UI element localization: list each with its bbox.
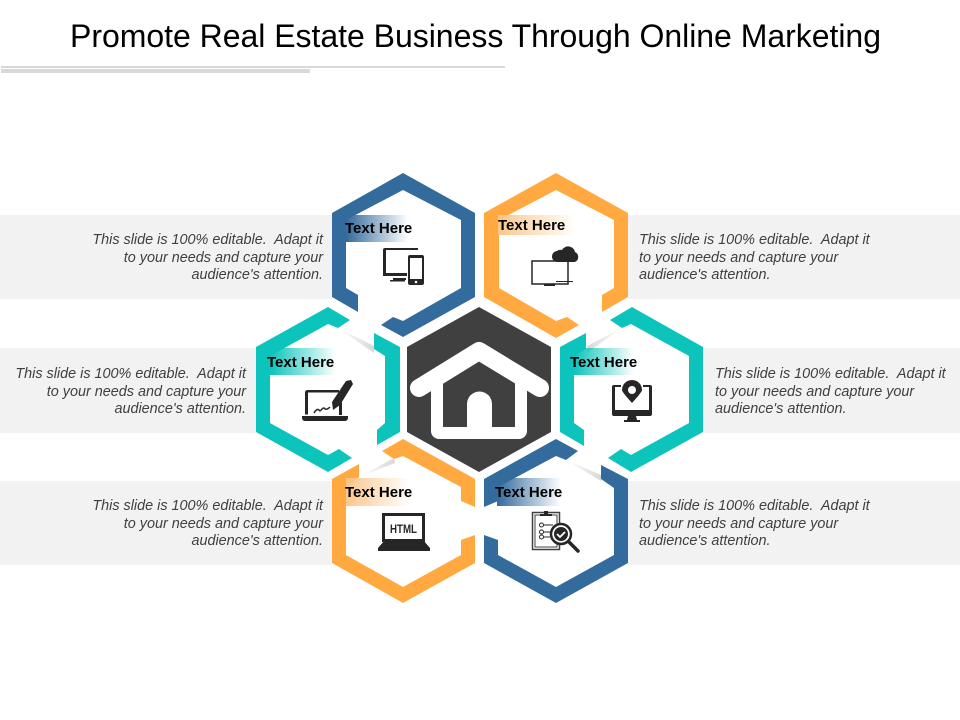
text block: bottom left: to your needs and capture your bbox=[124, 516, 324, 532]
icon: laptop with HTML screen bbox=[378, 513, 430, 551]
label: Text Here bbox=[498, 217, 565, 234]
text block: bottom left: This slide is 100% editable. Adapt it bbox=[92, 498, 324, 514]
text block: middle right: This slide is 100% editable. Adapt it bbox=[715, 366, 947, 382]
label: Text Here bbox=[495, 484, 562, 501]
text block: middle left: to your needs and capture your bbox=[47, 384, 247, 400]
panel: top right orange hexagon bbox=[484, 173, 628, 338]
text block: top left: audience's attention. bbox=[191, 267, 323, 283]
icon: monitor and phone bbox=[383, 248, 424, 285]
text block: top right: This slide is 100% editable. Adapt it bbox=[639, 232, 871, 248]
text block: top right: audience's attention. bbox=[639, 267, 771, 283]
center hexagon with house bbox=[407, 307, 551, 472]
text block: middle right: to your needs and capture your bbox=[715, 384, 915, 400]
text block: middle left: audience's attention. bbox=[114, 401, 246, 417]
label: Text Here bbox=[345, 484, 412, 501]
text block: bottom right: This slide is 100% editable. Adapt it bbox=[639, 498, 871, 514]
text block: middle right bbox=[715, 366, 947, 417]
text block: top left bbox=[92, 232, 324, 283]
background bands bbox=[0, 215, 960, 565]
text block: middle left bbox=[15, 366, 247, 417]
gap shadow bbox=[338, 328, 374, 353]
text block: bottom left: audience's attention. bbox=[191, 533, 323, 549]
icon: clipboard with magnifier bbox=[532, 511, 578, 551]
text block: top right bbox=[639, 232, 871, 283]
title underline bbox=[1, 66, 505, 73]
text block: middle left: This slide is 100% editable. Adapt it bbox=[15, 366, 247, 382]
gap shadow bbox=[566, 460, 601, 481]
panel: middle left teal hexagon bbox=[256, 307, 400, 472]
label: Text Here bbox=[267, 354, 334, 371]
panel: top left blue hexagon bbox=[332, 173, 475, 337]
panel: bottom left orange hexagon bbox=[332, 439, 475, 603]
text block: bottom right: audience's attention. bbox=[639, 533, 771, 549]
panel: bottom right blue hexagon bbox=[484, 439, 628, 603]
gap shadow bbox=[587, 328, 622, 353]
text block: bottom right bbox=[639, 498, 871, 549]
text block: middle right: audience's attention. bbox=[715, 401, 847, 417]
panel: middle right teal hexagon bbox=[560, 307, 703, 472]
title: Promote Real Estate Business Through Online Marketing bbox=[70, 18, 881, 54]
icon: house bbox=[419, 351, 540, 439]
label: Text Here bbox=[345, 220, 412, 237]
icon: screen and cloud bbox=[532, 246, 578, 286]
gap shadow bbox=[359, 458, 395, 477]
label: Text Here bbox=[570, 354, 637, 371]
text block: bottom left bbox=[92, 498, 324, 549]
icon: monitor with map pin bbox=[612, 380, 652, 422]
icon: laptop and pen bbox=[302, 380, 353, 421]
text block: top left: to your needs and capture your bbox=[124, 250, 324, 266]
text block: bottom right: to your needs and capture your bbox=[639, 516, 839, 532]
text block: top right: to your needs and capture your bbox=[639, 250, 839, 266]
icon: laptop with HTML screen: HTML bbox=[390, 522, 417, 536]
text block: top left: This slide is 100% editable. Adapt it bbox=[92, 232, 324, 248]
